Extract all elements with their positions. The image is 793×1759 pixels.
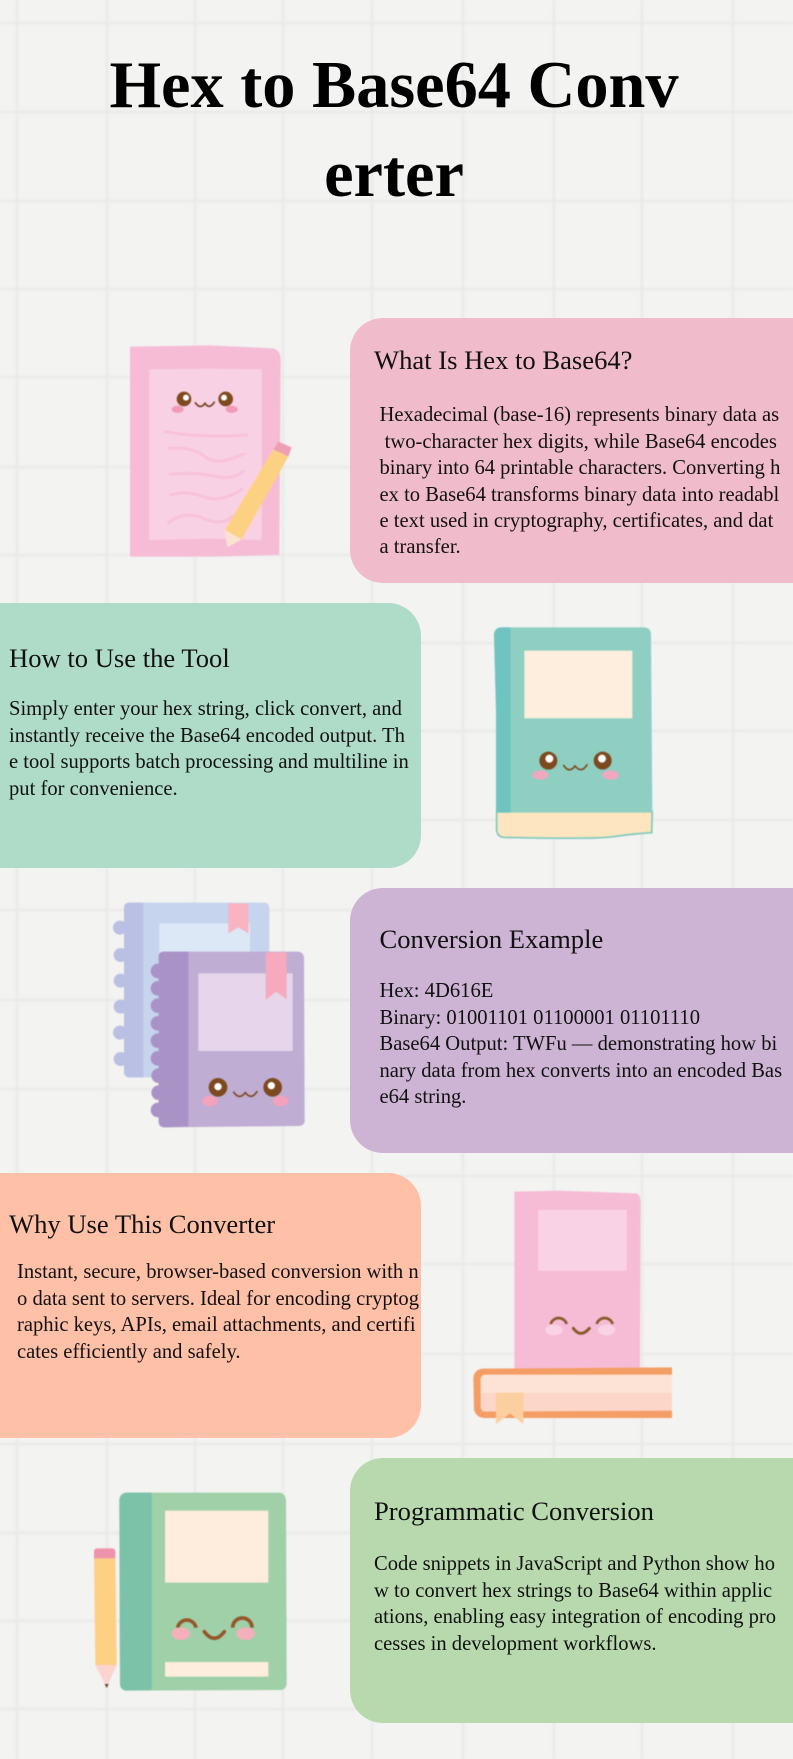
heading: Why Use This Converter <box>9 1209 275 1239</box>
heading: Programmatic Conversion <box>374 1496 654 1526</box>
heading: Conversion Example <box>380 924 603 954</box>
heading: What Is Hex to Base64? <box>374 345 632 375</box>
heading: How to Use the Tool <box>9 643 230 673</box>
icon: teal book <box>493 626 654 840</box>
text block: Simply enter your hex string, click convert, and instantly receive the Base64 encoded output. Th e tool supports batch processing and multiline in put for convenience. <box>9 698 409 800</box>
panel: programmatic conversion <box>350 1458 793 1723</box>
text block: Code snippets in JavaScript and Python show ho w to convert hex strings to Base64 within applic ations, enabling easy integration of encoding pro cesses in development workflows. <box>374 1553 776 1655</box>
text block: Hexadecimal (base-16) represents binary data as two-character hex digits, while Base64 encodes binary into 64 printable characters. Converting h ex to Base64 transforms binary data into readabl e text used in cryptography, certificates, and dat a transfer. <box>380 404 780 558</box>
title: erter <box>324 138 464 211</box>
text block: Hex: 4D616E Binary: 01001101 01100001 01101110 Base64 Output: TWFu — demonstrating how bi nary data from hex converts into an encoded Bas e64 string. <box>380 980 782 1108</box>
icon: pink notepad with pencil <box>130 344 292 557</box>
panel: how to use the tool <box>0 603 420 868</box>
text block: Instant, secure, browser-based conversion with n o data sent to servers. Ideal for encoding cryptog raphic keys, APIs, email attachments, and certifi cates efficiently and safely. <box>17 1261 419 1363</box>
panel: what is hex to base64 <box>350 318 793 583</box>
panel: conversion example <box>350 888 793 1153</box>
icon: pink book on orange book <box>472 1190 673 1424</box>
title <box>109 49 679 211</box>
panel: why use this converter <box>0 1173 420 1438</box>
icon: green book with pencil <box>93 1492 288 1692</box>
title: Hex to Base64 Conv <box>109 49 679 122</box>
icon: two purple spiral notebooks <box>112 902 306 1128</box>
